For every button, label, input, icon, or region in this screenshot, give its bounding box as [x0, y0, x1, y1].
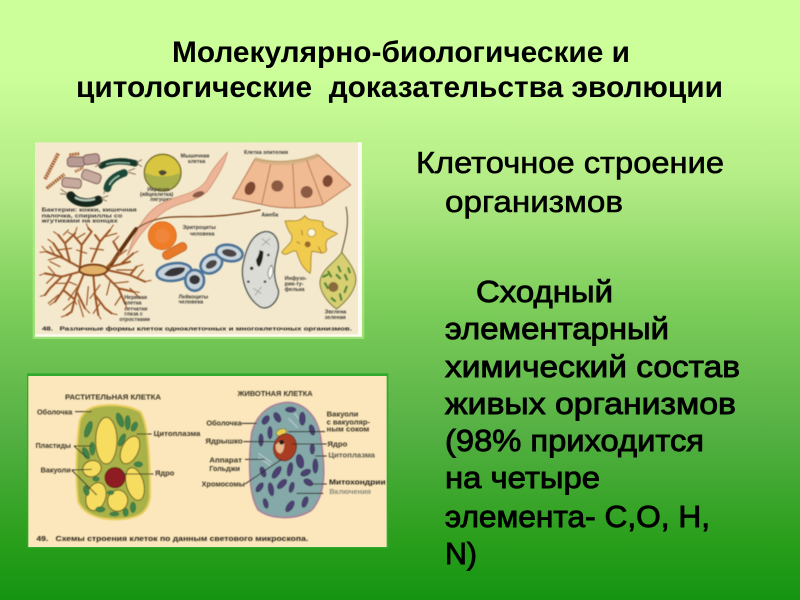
- title: [76, 36, 723, 104]
- plant cell labels: Пластиды: [36, 443, 71, 450]
- bacteria: [45, 153, 142, 203]
- animal cell labels: [202, 411, 386, 496]
- neuron: [40, 210, 260, 319]
- epithelial cells: Амеба: [261, 211, 278, 218]
- muscle cell: [127, 152, 227, 256]
- paramecium: Инфузо-: [285, 275, 307, 282]
- neuron caption: сетчатки: [124, 306, 147, 312]
- animal cell labels: Гольджи: [209, 466, 240, 473]
- red blood cells: Эритроциты: [183, 225, 216, 231]
- frog egg cell: Икринка: [147, 187, 169, 193]
- animal cell labels: Ядро: [327, 441, 347, 448]
- frog egg cell: [140, 154, 181, 203]
- animal cell labels: Цитоплазма: [328, 452, 375, 459]
- title: цитологические доказательства эволюции: [76, 71, 723, 104]
- euglena: Эвглена: [325, 310, 346, 316]
- bacteria caption: [40, 208, 137, 225]
- heading: cell structure of organisms: организмов: [445, 184, 623, 219]
- euglena: [320, 207, 356, 321]
- epithelial cells: Клетка эпителия: [244, 150, 288, 156]
- animal cell: [237, 389, 327, 517]
- animal cell labels: Ядрышко: [205, 439, 243, 446]
- epithelial cells: [233, 150, 351, 218]
- text block: elemental composition: элементарный: [445, 311, 669, 346]
- animal cell labels: Аппарат: [209, 457, 243, 464]
- leukocytes: Лейкоциты: [179, 293, 209, 300]
- amoeba: [282, 216, 337, 273]
- plant cell labels: Оболочка: [37, 408, 72, 416]
- plant cell labels: Вакуоли: [41, 468, 71, 475]
- frog egg cell: (яйцеклетка): [140, 191, 174, 198]
- animal cell labels: ным соком: [327, 427, 369, 434]
- animal cell labels: Митохондрии: [329, 480, 386, 487]
- text block: elemental composition: Сходный: [476, 274, 613, 309]
- neuron caption: клетка: [124, 300, 142, 306]
- panel: plant and animal cells illustration: [27, 373, 388, 548]
- plant cell labels: [36, 408, 200, 477]
- plant cell: [65, 392, 162, 519]
- plant cell labels: Ядро: [155, 470, 174, 477]
- neuron caption: [119, 295, 150, 323]
- red blood cells: человека: [190, 231, 214, 237]
- text block: elemental composition: [445, 274, 740, 571]
- animal cell labels: Вакуоли: [327, 411, 358, 418]
- leukocytes: [156, 243, 244, 306]
- text block: elemental composition: N): [445, 536, 477, 571]
- leukocytes: человека: [179, 300, 203, 306]
- text block: elemental composition: на четыре: [445, 460, 600, 495]
- figure 48 caption: 48. Различные формы клеток одноклеточных и многоклеточных организмов.: [42, 325, 353, 332]
- panel: forms of cells illustration: [33, 140, 364, 339]
- plant cell: РАСТИТЕЛЬНАЯ КЛЕТКА: [65, 392, 162, 401]
- title: Молекулярно-биологические и: [172, 36, 630, 69]
- figure 49 caption: 49. Схемы строения клеток по данным светового микроскопа.: [36, 536, 308, 543]
- neuron caption: отростками: [119, 317, 150, 323]
- bacteria caption: жгутиками на концах: [40, 219, 119, 225]
- paramecium: фелька: [285, 286, 305, 293]
- heading: cell structure of organisms: [416, 145, 724, 219]
- text block: elemental composition: (98% приходится: [445, 423, 704, 458]
- muscle cell: Мышечная: [181, 154, 209, 160]
- animal cell labels: Хромосомы: [202, 481, 245, 488]
- animal cell labels: Оболочка: [206, 419, 242, 427]
- paramecium: [242, 232, 307, 308]
- heading: cell structure of organisms: Клеточное строение: [416, 145, 724, 180]
- bacteria caption: Бактерии: кокки, кишечная: [42, 208, 137, 214]
- text block: elemental composition: живых организмов: [445, 386, 736, 421]
- plant cell labels: Цитоплазма: [154, 431, 200, 438]
- euglena: зеленая: [325, 315, 346, 321]
- text block: elemental composition: химический состав: [445, 349, 740, 384]
- red blood cells: [148, 222, 216, 261]
- text block: elemental composition: элемента- C,O, H,: [445, 499, 710, 534]
- neuron caption: Нервная: [124, 295, 147, 301]
- animal cell labels: Включения: [329, 489, 371, 496]
- paramecium: рия-ту-: [285, 281, 304, 287]
- bacteria caption: палочка, спириллы со: [42, 213, 123, 219]
- animal cell: ЖИВОТНАЯ КЛЕТКА: [237, 389, 313, 398]
- animal cell labels: с вакуоляр-: [327, 419, 371, 426]
- muscle cell: клетка: [188, 159, 205, 165]
- frog egg cell: лягушки: [150, 197, 172, 203]
- neuron caption: глаза с: [124, 312, 143, 318]
